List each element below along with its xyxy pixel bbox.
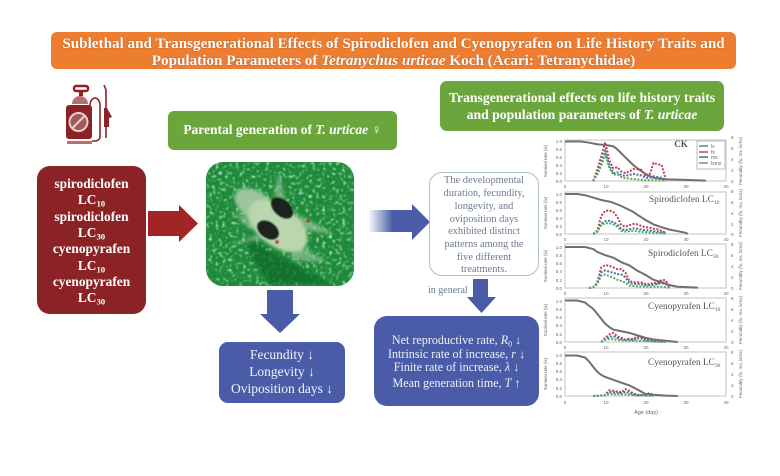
axis tick labels: left survival values: 1.0 [556,299,562,304]
axis tick labels: left survival values: 0.4 [556,323,562,328]
heading: parental generation [168,111,397,150]
axis tick labels: right fecundity values: 4 [731,318,734,323]
axis tick labels: right fecundity values: 8 [731,296,734,301]
axis titles: fecundity: Fecundity (fx, mx, lxmx) [738,189,743,237]
axis tick labels: age values: 30 [683,184,689,189]
axis tick labels: right fecundity values: 0 [731,394,734,399]
axis tick labels: right fecundity values [731,135,734,399]
axis tick labels: age values: 10 [603,237,609,242]
axis tick labels: left survival values: 0.2 [556,386,562,391]
callout: developmental duration finding: patterns among the [444,239,524,250]
panel: pesticide treatments [37,166,146,314]
panel: population parameters: Intrinsic rate of increase, r ↓ [388,347,525,361]
axis tick labels: right fecundity values: 4 [731,157,734,162]
chart title: Spirodiclofen LC10: Spirodiclofen LC [649,195,714,205]
axis tick labels: age values: 40 [723,400,729,405]
axis titles: fecundity: Fecundity (fx, mx, lxmx) [738,296,743,344]
axis tick labels: left survival values [556,139,562,399]
heading: transgenerational effects [440,81,724,131]
axis tick labels: age values: 30 [683,400,689,405]
panel: parental effects: Longevity ↓ [249,364,315,379]
axis tick labels: age values: 0 [564,400,567,405]
axis tick labels: left survival values: 0.4 [556,216,562,221]
axis tick labels: right fecundity values: 2 [731,329,734,334]
axis tick labels: age values: 0 [564,237,567,242]
axis tick labels: age values: 10 [603,184,609,189]
axis tick labels: age values: 20 [643,345,649,350]
callout: developmental duration finding: longevity, and [455,201,513,212]
heading: transgenerational effects: and population parameters of T. urticae [467,107,697,122]
chart legend: lx [711,144,715,150]
axis tick labels: age values: 10 [603,291,609,296]
chart legend [697,141,725,169]
axis tick labels: left survival values: 0.8 [556,361,562,366]
axis tick labels: right fecundity values: 8 [731,189,734,194]
heading: parental generation: Parental generation of T. urticae ♀ [183,122,382,137]
axis tick labels: right fecundity values: 4 [731,264,734,269]
panel: pesticide treatments: spirodiclofen [54,176,129,191]
axis titles: survival rate: Survival rate (lx) [543,303,548,336]
chart title: Cyenopyrafen LC30: 30 [715,363,721,369]
axis tick labels: right fecundity values: 6 [731,253,734,258]
axis titles: survival rate: Survival rate (lx) [543,196,548,229]
chart: Cyenopyrafen LC10 [565,298,726,342]
axis tick labels: left survival values: 0.8 [556,307,562,312]
panel: parental effects [219,342,345,403]
axis tick labels: age values [564,184,729,405]
axis tick labels: left survival values: 0.8 [556,147,562,152]
panel: pesticide treatments: LC10 [78,192,105,209]
callout: developmental duration finding: duration, fecundity, [444,188,524,199]
arrow: treatments to mite [148,205,198,242]
axis tick labels: age values: 20 [643,400,649,405]
chart title: Spirodiclofen LC10: 10 [714,200,720,206]
axis tick labels: right fecundity values: 4 [731,372,734,377]
axis tick labels: left survival values: 0.4 [556,269,562,274]
callout: developmental duration finding: treatments. [461,264,507,275]
axis tick labels: age values: 20 [643,237,649,242]
arrow: findings to population parameters [467,279,496,313]
axis tick labels: age values: 30 [683,345,689,350]
panel: population parameters: Net reproductive rate, R0 ↓ [392,333,521,348]
axis tick labels: right fecundity values: 6 [731,307,734,312]
axis tick labels: left survival values: 1.0 [556,139,562,144]
callout: developmental duration finding: five different [457,252,511,263]
panel: pesticide treatments: LC30 [78,290,105,307]
callout: developmental duration finding: exhibited distinct [448,226,520,237]
axis tick labels: age values: 0 [564,291,567,296]
axis tick labels: left survival values: 1.0 [556,245,562,250]
axis tick labels: right fecundity values: 0 [731,286,734,291]
axis titles: survival rate: Survival rate (lx) [543,144,548,177]
axis tick labels: age values: 0 [564,184,567,189]
axis tick labels: left survival values: 0.6 [556,315,562,320]
axis tick labels: left survival values: 0.2 [556,332,562,337]
panel: pesticide treatments: LC30 [78,225,105,242]
panel: population parameters: Finite rate of increase, λ ↓ [394,360,519,374]
panel: pesticide treatments: cyenopyrafen [53,241,130,256]
chart: Spirodiclofen LC30 [565,244,726,288]
axis tick labels: age values: 40 [723,345,729,350]
axis titles: survival rate: Survival rate (lx) [543,357,548,390]
chart: Spirodiclofen LC10 [565,192,726,234]
axis tick labels: left survival values: 0.6 [556,155,562,160]
chart legend: fx [711,150,715,156]
axis tick labels: age values: 10 [603,400,609,405]
axis titles: fecundity: Fecundity (fx, mx, lxmx) [738,242,743,290]
axis tick labels: age values: 40 [723,291,729,296]
axis titles: fecundity: Fecundity (fx, mx, lxmx) [738,137,743,185]
axis tick labels: right fecundity values: 0 [731,340,734,345]
axis tick labels: left survival values: 0.2 [556,224,562,229]
axis tick labels: age values: 10 [603,345,609,350]
chart legend: lxmx [711,161,722,167]
axis tick labels: left survival values: 0.8 [556,253,562,258]
axis tick labels: right fecundity values: 6 [731,200,734,205]
axis tick labels: age values: 20 [643,291,649,296]
axis tick labels: left survival values: 0.8 [556,200,562,205]
callout: developmental duration finding: The developmental [444,175,524,186]
axis tick labels: right fecundity values: 4 [731,211,734,216]
panel: parental effects: Fecundity ↓ [250,347,314,362]
axis tick labels: left survival values: 0.6 [556,369,562,374]
axis tick labels: left survival values: 0.0 [556,179,562,184]
axis tick labels: age values: 30 [683,237,689,242]
callout: developmental duration finding [429,172,539,276]
panel: pesticide treatments: LC10 [78,258,105,275]
axis tick labels: left survival values: 0.0 [556,232,562,237]
photo: spider mite on leaf [206,162,354,286]
axis tick labels: left survival values: 1.0 [556,353,562,358]
panel: pesticide treatments: cyenopyrafen [53,274,130,289]
axis tick labels: left survival values: 0.6 [556,261,562,266]
axis titles: survival rate: Survival rate (lx) [543,249,548,282]
axis tick labels: age values: 0 [564,345,567,350]
panel: population parameters: Mean generation time, T ↑ [392,376,520,390]
axis tick labels: left survival values: 0.2 [556,171,562,176]
axis tick labels: left survival values: 0.4 [556,377,562,382]
axis tick labels: left survival values: 0.0 [556,340,562,345]
axis title: age: Age (day) [634,410,658,416]
chart: Cyenopyrafen LC30 [565,352,726,396]
axis tick labels: right fecundity values: 8 [731,350,734,355]
axis tick labels: age values: 40 [723,184,729,189]
axis tick labels: right fecundity values: 2 [731,222,734,227]
panel: population parameters [374,316,539,406]
axis tick labels: right fecundity values: 2 [731,275,734,280]
title banner: Sublethal and Transgenerational Effects of Spirodiclofen and Cyenopyrafen on Life History Traits and [62,35,725,52]
heading: transgenerational effects: Transgenerational effects on life history traits [449,90,715,105]
panel: parental effects: Oviposition days ↓ [231,381,333,396]
arrow: mite to fecundity effects [260,290,300,333]
axis tick labels: right fecundity values: 6 [731,146,734,151]
chart title: Cyenopyrafen LC10: 10 [715,307,721,313]
axis tick labels: left survival values: 0.4 [556,163,562,168]
axis tick labels: right fecundity values: 0 [731,232,734,237]
chart title: Spirodiclofen LC30: Spirodiclofen LC [648,249,713,259]
label: in general: in general [428,285,468,296]
axis titles: survival rate [543,144,548,390]
icon: pesticide sprayer [66,84,112,144]
axis tick labels: right fecundity values: 8 [731,242,734,247]
axis tick labels: right fecundity values: 2 [731,168,734,173]
chart title: Spirodiclofen LC30: 30 [713,254,719,260]
axis tick labels: left survival values: 1.0 [556,192,562,197]
chart title: Cyenopyrafen LC30: Cyenopyrafen LC [648,358,715,368]
title banner [51,32,736,69]
chart: CK [565,139,726,181]
arrow: mite to transgenerational findings [369,204,429,240]
axis tick labels: right fecundity values: 6 [731,361,734,366]
axis titles: fecundity: Fecundity (fx, mx, lxmx) [738,350,743,398]
axis tick labels: age values: 30 [683,291,689,296]
title banner: Population Parameters of Tetranychus urticae Koch (Acari: Tetranychidae) [152,52,635,69]
axis tick labels: right fecundity values: 2 [731,383,734,388]
axis titles: fecundity [738,137,743,398]
axis tick labels: left survival values: 0.0 [556,394,562,399]
chart legend: mx [711,155,718,161]
callout: developmental duration finding: oviposition days [450,214,518,225]
axis tick labels: right fecundity values: 0 [731,179,734,184]
axis tick labels: age values: 40 [723,237,729,242]
axis tick labels: right fecundity values: 8 [731,135,734,140]
axis tick labels: left survival values: 0.0 [556,286,562,291]
axis tick labels: left survival values: 0.6 [556,208,562,213]
axis tick labels: left survival values: 0.2 [556,278,562,283]
chart title: Cyenopyrafen LC10: Cyenopyrafen LC [648,302,715,312]
axis tick labels: age values: 20 [643,184,649,189]
panel: pesticide treatments: spirodiclofen [54,209,129,224]
chart title: CK: CK [674,139,688,149]
